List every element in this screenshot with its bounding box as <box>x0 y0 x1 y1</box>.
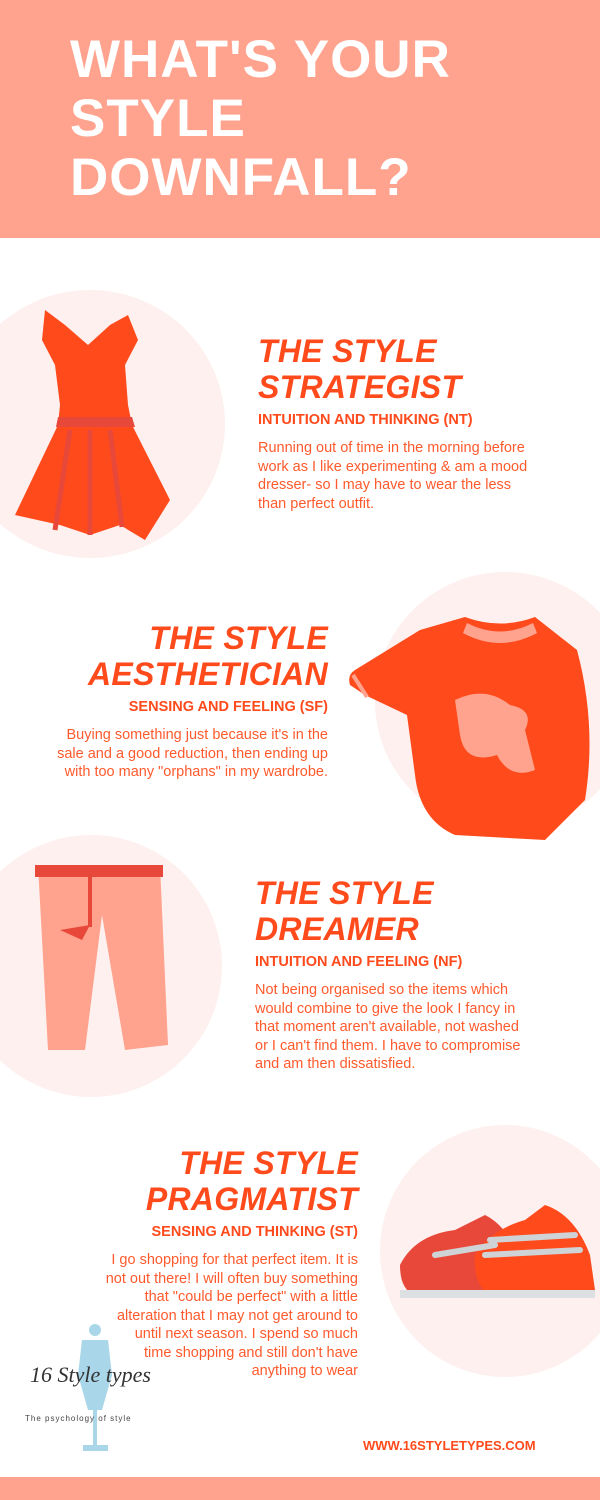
title: WHAT'S YOUR <box>70 30 451 89</box>
body: time shopping and still don't have <box>144 1344 358 1360</box>
title: STYLE <box>70 89 246 148</box>
section 4 text <box>106 1145 360 1379</box>
subtitle: SENSING AND FEELING (SF) <box>129 699 328 715</box>
heading: AESTHETICIAN <box>88 656 328 692</box>
circle: dress <box>0 290 225 558</box>
heading <box>87 620 328 692</box>
body: or I can't find them. I have to compromise <box>255 1038 520 1054</box>
icon: mannequin <box>78 1324 112 1451</box>
heading <box>146 1145 360 1217</box>
circle: pants <box>0 835 222 1097</box>
subtitle: SENSING AND THINKING (ST) <box>152 1224 358 1240</box>
heading: THE STYLE <box>149 620 328 656</box>
body: with too many "orphans" in my wardrobe. <box>65 764 328 780</box>
body: would combine to give the look I fancy in <box>255 1000 515 1016</box>
body: Not being organised so the items which <box>255 982 508 998</box>
footer band <box>0 1477 600 1500</box>
body: until next season. I spend so much <box>135 1326 358 1342</box>
body: that "could be perfect" with a little <box>145 1289 358 1305</box>
heading: THE STYLE <box>255 875 434 911</box>
heading <box>258 333 464 405</box>
body: that moment aren't available, not washed <box>255 1019 519 1035</box>
circle: shoes <box>380 1125 600 1377</box>
body: than perfect outfit. <box>258 496 374 512</box>
website: WWW.16STYLETYPES.COM <box>363 1438 536 1453</box>
subtitle: INTUITION AND FEELING (NF) <box>255 954 462 970</box>
section 1 text <box>258 333 527 512</box>
circle: sweater <box>375 572 600 830</box>
body: not out there! I will often buy something <box>106 1270 358 1286</box>
body: sale and a good reduction, then ending up <box>57 746 328 762</box>
section 3 text <box>255 875 520 1072</box>
icon: shoes <box>400 1205 595 1298</box>
body: dresser- so I may have to wear the less <box>258 477 511 493</box>
heading: DREAMER <box>255 911 419 947</box>
heading: THE STYLE <box>258 333 437 369</box>
icon: pants <box>35 865 168 1050</box>
body: Running out of time in the morning before <box>258 440 525 456</box>
icon: dress <box>15 310 170 540</box>
body <box>106 1252 358 1379</box>
body: and am then dissatisfied. <box>255 1056 415 1072</box>
title: DOWNFALL? <box>70 148 412 207</box>
heading <box>255 875 434 947</box>
body: I go shopping for that perfect item. It is <box>111 1252 358 1268</box>
body: alteration that I may not get around to <box>117 1308 358 1324</box>
section 2 text <box>57 620 328 780</box>
body <box>258 440 527 512</box>
icon: sweater <box>349 617 590 840</box>
tagline: The psychology of style <box>25 1414 132 1423</box>
heading: THE STYLE <box>179 1145 358 1181</box>
logo text: 16 Style types <box>30 1362 151 1387</box>
logo <box>25 1324 151 1451</box>
subtitle: INTUITION AND THINKING (NT) <box>258 412 473 428</box>
body: anything to wear <box>252 1363 358 1379</box>
body: work as I like experimenting & am a mood <box>258 458 527 474</box>
body: Buying something just because it's in the <box>66 727 328 743</box>
body <box>57 727 328 780</box>
body <box>255 982 520 1072</box>
heading: STRATEGIST <box>258 369 461 405</box>
heading: PRAGMATIST <box>146 1181 358 1217</box>
title <box>70 30 451 207</box>
header band <box>0 0 600 238</box>
